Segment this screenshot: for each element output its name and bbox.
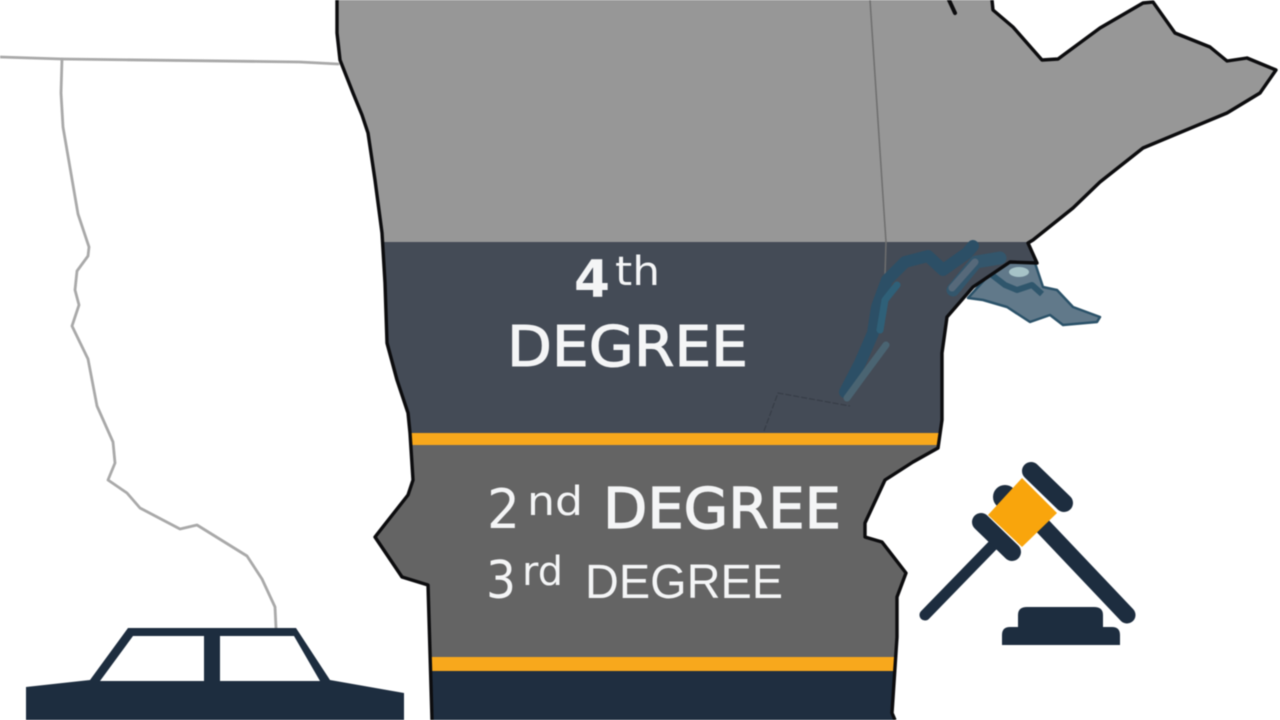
label: 4th degree [507, 249, 748, 380]
label: 3rd degree: rd [522, 549, 563, 595]
gavel head [988, 478, 1057, 547]
lake sliver [968, 262, 1100, 325]
state outline [337, 0, 432, 720]
label: 4th degree: th [615, 249, 660, 295]
label: 3rd degree [486, 549, 783, 611]
label: 2nd degree: DEGREE [603, 477, 841, 542]
river [845, 246, 1000, 398]
icon: car [26, 628, 404, 720]
county line [870, 0, 886, 275]
band: lowest degree [432, 670, 894, 720]
label: 2nd degree [487, 477, 841, 542]
label: 2nd degree: 2 [487, 478, 520, 541]
gavel handle right [1035, 518, 1127, 615]
band: upper region [330, 0, 1280, 242]
gavel handle left [925, 543, 995, 615]
gavel cap bottom [981, 522, 1012, 552]
icon: gavel [925, 471, 1127, 645]
label: 4th degree: DEGREE [507, 315, 748, 380]
lake highlight [1009, 267, 1029, 277]
lake inner shade [992, 275, 1042, 294]
band: 4th degree [384, 241, 1035, 434]
state outline east [865, 0, 1276, 720]
label: 3rd degree: 3 [486, 551, 516, 611]
divider: orange upper [411, 432, 940, 446]
gavel knob [993, 485, 1017, 509]
neighboring state borders [0, 57, 338, 628]
divider: orange lower [431, 656, 895, 672]
faint county boundary [764, 393, 850, 431]
label: 2nd degree: nd [527, 479, 583, 525]
gavel cap top [1031, 471, 1064, 503]
label: 4th degree: 4 [574, 250, 610, 310]
map: Minnesota degree bands [330, 0, 1280, 720]
band: 2nd and 3rd degree [376, 444, 938, 658]
island mark [949, 0, 955, 13]
gavel base [1002, 607, 1120, 645]
label: 3rd degree: DEGREE [585, 556, 783, 609]
